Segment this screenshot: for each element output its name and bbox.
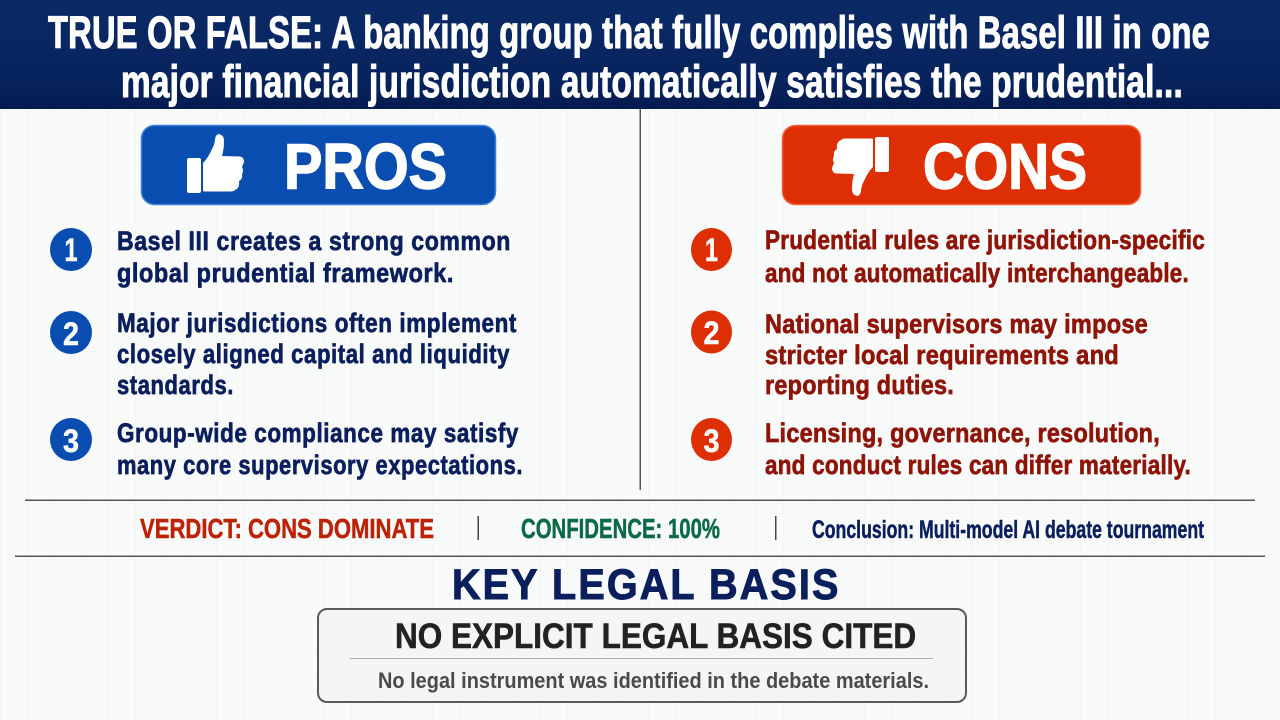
verdict: VERDICT: CONS DOMINATE [140,513,434,544]
legal basis title: NO EXPLICIT LEGAL BASIS CITED [395,618,916,656]
verdict strip [140,513,1204,544]
con point 3: and conduct rules can differ materially. [765,450,1191,480]
con point 2: 2 [704,315,720,351]
pro point 3: many core supervisory expectations. [117,450,523,480]
panel: pros [50,126,523,480]
pro point 1: Basel III creates a strong common [117,226,511,256]
pros heading badge [142,126,496,204]
con point 3: 3 [704,423,720,459]
con point 1: 1 [705,232,718,268]
legal basis note: No legal instrument was identified in the debate materials. [378,668,929,693]
pros heading badge: PROS [284,130,447,202]
pro point 2: standards. [117,370,234,400]
con point 1 [691,225,1205,288]
pro point 3: Group-wide compliance may satisfy [117,418,519,448]
icon: thumbs up [187,134,244,193]
key legal basis heading: KEY LEGAL BASIS [452,560,838,608]
con point 2: reporting duties. [765,370,954,400]
pro point 2: 2 [63,316,79,352]
icon: thumbs down [832,137,889,196]
header banner [0,0,1280,109]
pro point 2: Major jurisdictions often implement [117,308,517,338]
pro point 2: closely aligned capital and liquidity [117,339,510,369]
pro point 3 [50,418,523,480]
pro point 2 [50,308,517,400]
con point 2 [691,309,1148,400]
con point 3 [691,418,1191,480]
pro point 3: 3 [63,423,79,459]
pro point 1 [50,226,511,288]
pro point 1: 1 [64,232,78,268]
pro point 1: global prudential framework. [117,258,454,288]
con point 3: Licensing, governance, resolution, [765,418,1160,448]
con point 1: and not automatically interchangeable. [765,258,1189,288]
legal basis box [318,609,966,702]
confidence: CONFIDENCE: 100% [521,513,720,544]
con point 2: National supervisors may impose [765,309,1148,339]
con point 2: stricter local requirements and [765,340,1119,370]
title [48,7,1210,107]
cons heading badge: CONS [923,130,1087,202]
panel: cons [691,126,1205,480]
con point 1: Prudential rules are jurisdiction-specific [765,225,1205,255]
center divider [640,109,641,490]
cons heading badge [782,126,1140,204]
